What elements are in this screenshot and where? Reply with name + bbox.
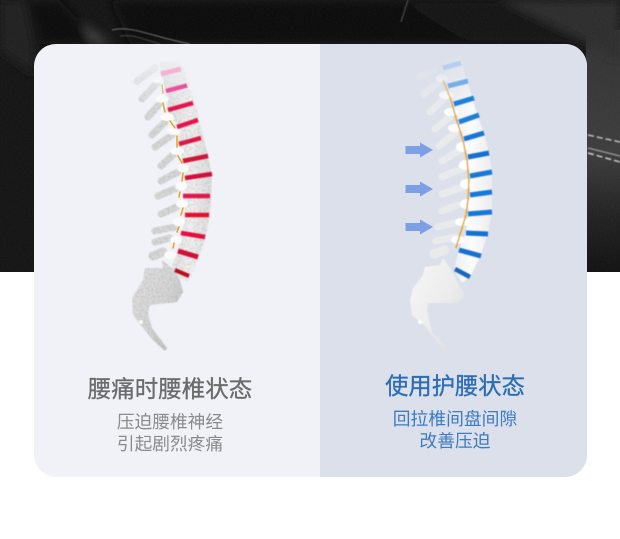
text block: right panel description: 改善压迫	[419, 431, 491, 451]
illustration: spine with compressed red discs	[132, 64, 213, 351]
text block: right panel description: 回拉椎间盘间隙	[393, 409, 517, 429]
sacrum	[132, 260, 183, 351]
spinous processes	[420, 70, 463, 254]
heading: right panel title: 使用护腰状态	[385, 373, 525, 399]
spinous processes	[137, 68, 178, 256]
text block: left panel description	[117, 412, 223, 454]
background: dark leather seat photo	[0, 0, 620, 272]
blue discs	[443, 63, 492, 277]
facet joints	[152, 76, 189, 259]
icon: arrow middle	[406, 182, 433, 196]
sacrum	[410, 258, 464, 344]
comparison card	[34, 44, 587, 477]
vertebral bodies	[448, 73, 492, 283]
text block: right panel description	[393, 409, 517, 451]
nerve segments	[162, 85, 183, 248]
icon: arrow bottom	[406, 220, 433, 234]
facet joints	[436, 74, 472, 244]
red discs	[161, 69, 212, 276]
vertebral bodies	[160, 60, 212, 282]
icon: arrow top	[406, 142, 433, 158]
text block: left panel description: 引起剧烈疼痛	[117, 434, 223, 454]
illustration: spine with supported blue discs	[410, 60, 494, 344]
nerve	[443, 80, 469, 248]
text block: left panel description: 压迫腰椎神经	[117, 412, 223, 432]
heading: left panel title: 腰痛时腰椎状态	[88, 376, 252, 402]
icon: arrows pressing on the spine	[406, 142, 433, 234]
panel: right half background	[320, 44, 587, 477]
